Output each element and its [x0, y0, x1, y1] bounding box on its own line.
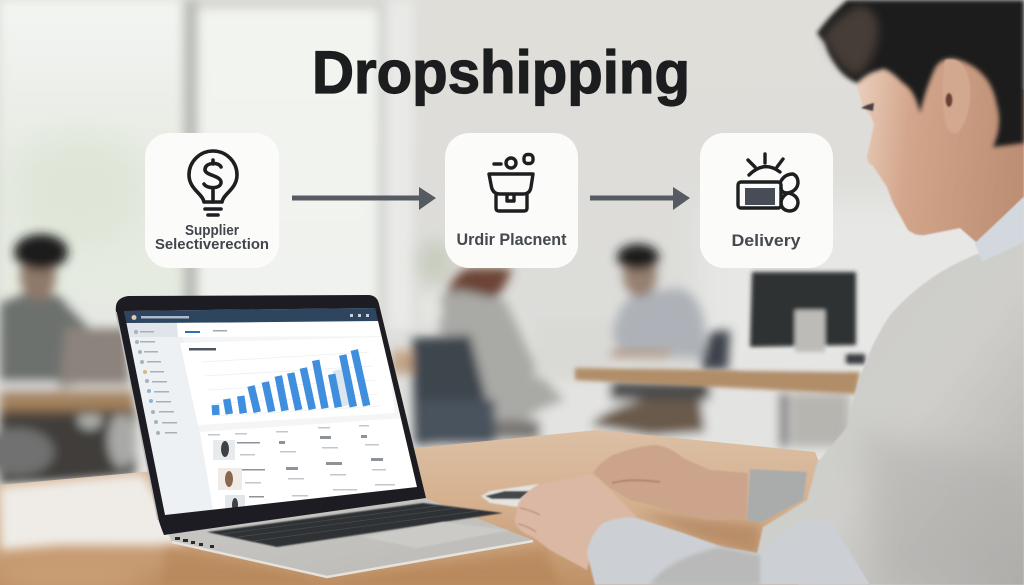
- left coworker: [0, 234, 150, 485]
- person at right: [515, 0, 1024, 585]
- arrow: supplier to order: [292, 187, 436, 210]
- product table: [200, 418, 420, 515]
- card: Supplier Selection: [145, 133, 279, 268]
- right wall light: [700, 200, 1024, 440]
- title: Dropshipping: [312, 39, 690, 106]
- ear: [942, 59, 970, 133]
- label: Supplier Selectiverection: Supplier: [185, 223, 239, 239]
- plant: [417, 240, 453, 284]
- laptop: [100, 295, 533, 577]
- label: Delivery: Delivery: [732, 231, 801, 250]
- dashboard sidebar: [126, 322, 178, 435]
- icon: dollar light bulb: [189, 151, 237, 215]
- laptop lid: [116, 295, 426, 535]
- forearm sleeve: [587, 518, 870, 585]
- wooden table: [0, 430, 870, 585]
- label: Urdir Placnent: Urdir Placnent: [456, 230, 567, 249]
- laptop screen dashboard: [124, 308, 417, 515]
- desk and monitor: [575, 272, 865, 394]
- card: Order Placement: [445, 133, 578, 268]
- icon: order package: [489, 154, 533, 211]
- torso shirt: [757, 240, 1024, 585]
- label: Supplier Selectiverection: Selectiverection: [155, 237, 269, 253]
- laptop base: [168, 498, 533, 577]
- label: Supplier Selectiverection: [155, 223, 269, 253]
- hair: [817, 0, 1024, 147]
- far woman, chair, far man, desk, monitor: [392, 244, 850, 450]
- icon: delivery box: [738, 154, 798, 211]
- bar chart: blue monthly bars: [180, 337, 395, 425]
- eye: [861, 103, 874, 111]
- phone on table: [481, 484, 545, 507]
- window: [0, 0, 413, 330]
- cuff: [747, 469, 807, 523]
- collar: [975, 197, 1024, 262]
- neck and face: [855, 50, 1024, 243]
- front hand: [515, 475, 637, 570]
- rear hand: [593, 445, 748, 520]
- dashboard top bar: [124, 308, 380, 337]
- arrow: order to delivery: [590, 187, 690, 210]
- card: Delivery: [700, 133, 833, 268]
